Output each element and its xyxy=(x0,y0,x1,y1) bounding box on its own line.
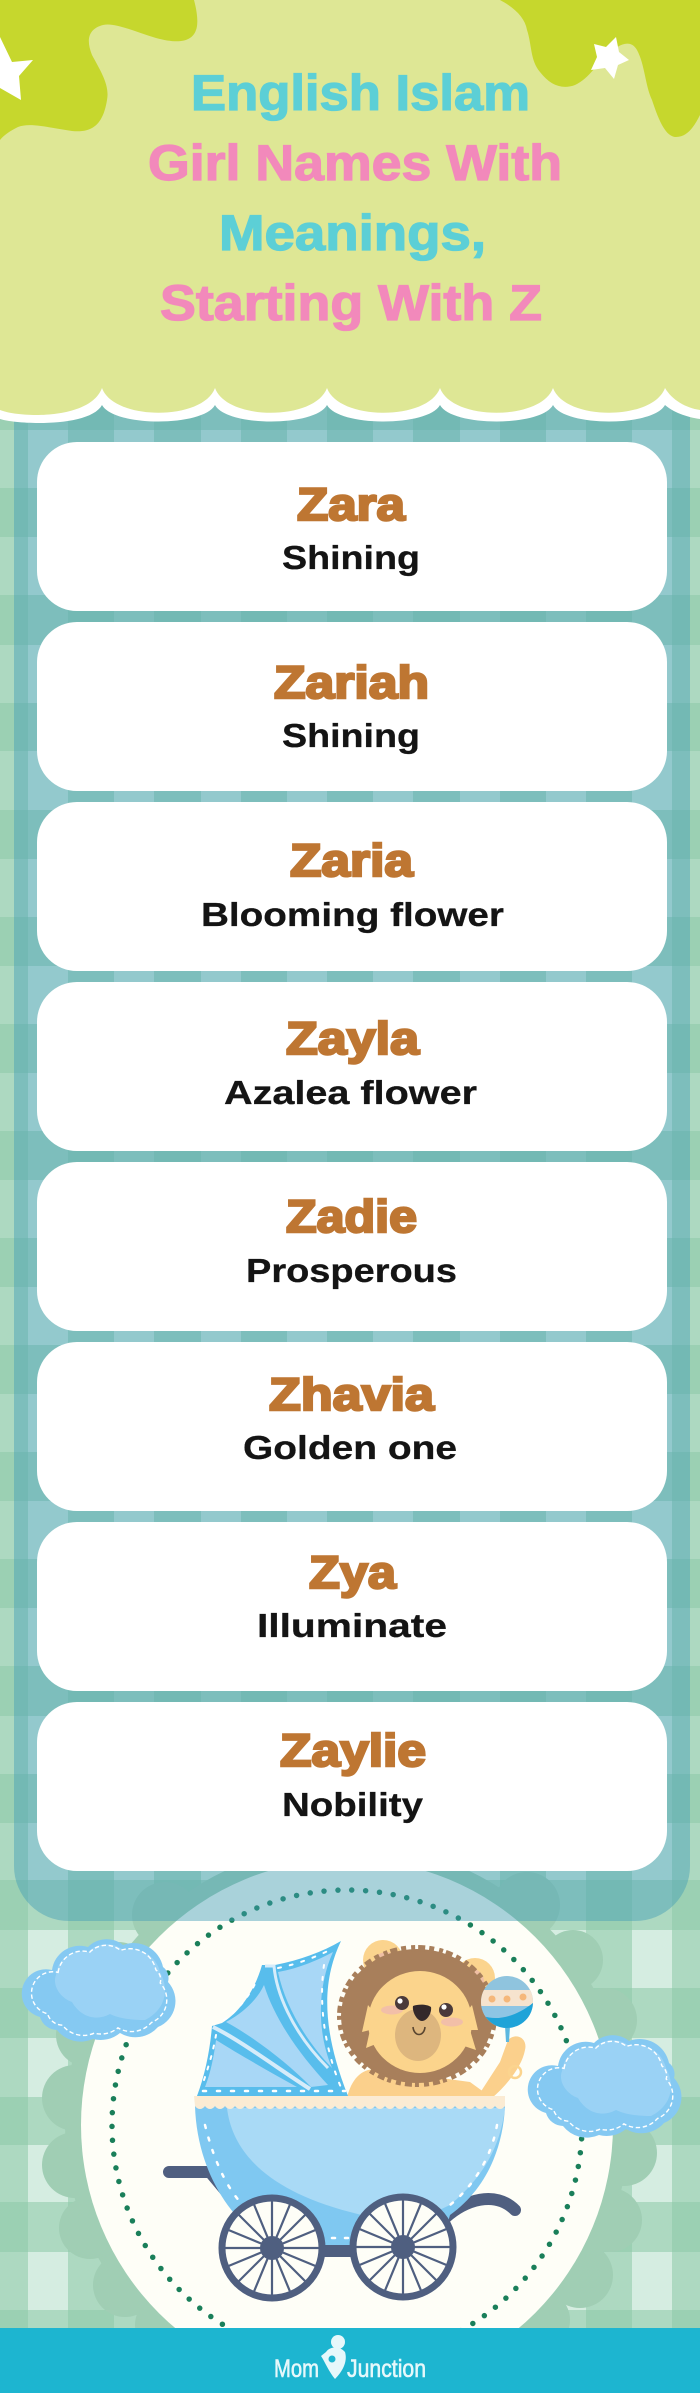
dotted ring xyxy=(112,1890,582,2360)
lime blob left xyxy=(0,0,197,140)
right cloud xyxy=(528,2035,681,2138)
stroller illustration xyxy=(169,1940,536,2298)
white scalloped edge xyxy=(0,0,700,423)
stroller basket xyxy=(195,2106,505,2250)
name: Zhavia xyxy=(269,1369,435,1420)
card: Zariah xyxy=(37,622,667,791)
meaning: Illuminate xyxy=(257,1607,447,1644)
card: Zya xyxy=(37,1522,667,1691)
card: Zara xyxy=(37,442,667,611)
white medallion circle xyxy=(81,1859,613,2391)
meaning: Blooming flower xyxy=(201,896,504,933)
lime blob right xyxy=(500,0,700,137)
card: Zayla xyxy=(37,982,667,1151)
name: Zayla xyxy=(286,1013,420,1064)
stroller handle right xyxy=(445,2199,515,2218)
title: Meanings, xyxy=(219,205,486,261)
name: Zadie xyxy=(286,1191,417,1242)
name: Zara xyxy=(297,479,406,530)
pale green scalloped field xyxy=(0,0,700,415)
stroller lace trim xyxy=(194,2096,505,2109)
lion mane xyxy=(340,1948,494,2084)
star right xyxy=(591,37,629,79)
card: Zhavia xyxy=(37,1342,667,1511)
left wheel xyxy=(222,2198,322,2298)
name: Zaria xyxy=(290,835,414,886)
stroller handle left xyxy=(169,2172,245,2214)
logo: MomJunction: Mom xyxy=(274,2355,319,2383)
meaning: Golden one xyxy=(243,1429,457,1466)
name: Zariah xyxy=(274,657,429,708)
meaning: Nobility xyxy=(282,1786,424,1823)
right wheel xyxy=(353,2197,453,2297)
card: Zaylie xyxy=(37,1702,667,1871)
meaning: Shining xyxy=(282,717,420,754)
logo: MomJunction: Junction xyxy=(347,2355,426,2383)
logo mother and child mark xyxy=(321,2335,346,2379)
meaning: Prosperous xyxy=(246,1252,457,1289)
footer band xyxy=(0,2328,700,2393)
title xyxy=(148,65,562,331)
name: Zya xyxy=(309,1547,397,1598)
lion arm and ring xyxy=(478,2036,525,2098)
stroller canopy xyxy=(197,1941,348,2096)
lion ears xyxy=(363,1940,495,1998)
header band xyxy=(0,0,700,423)
meaning: Shining xyxy=(282,539,420,576)
lion face xyxy=(362,1971,478,2073)
star left xyxy=(0,37,33,100)
card: Zadie xyxy=(37,1162,667,1331)
left cloud xyxy=(22,1939,175,2042)
meaning: Azalea flower xyxy=(224,1074,477,1111)
title: English Islam xyxy=(191,65,530,121)
name: Zaylie xyxy=(280,1725,426,1776)
stroller axle xyxy=(320,2245,360,2257)
lion xyxy=(340,1940,536,2098)
card: Zaria xyxy=(37,802,667,971)
title: Starting With Z xyxy=(160,275,542,331)
scalloped green frame behind the medallion xyxy=(42,1843,657,2393)
lion body xyxy=(347,2069,492,2098)
rattle xyxy=(480,1976,536,2042)
title: Girl Names With xyxy=(148,135,562,191)
translucent teal panel xyxy=(14,340,690,1921)
logo: MomJunction xyxy=(274,2335,426,2383)
